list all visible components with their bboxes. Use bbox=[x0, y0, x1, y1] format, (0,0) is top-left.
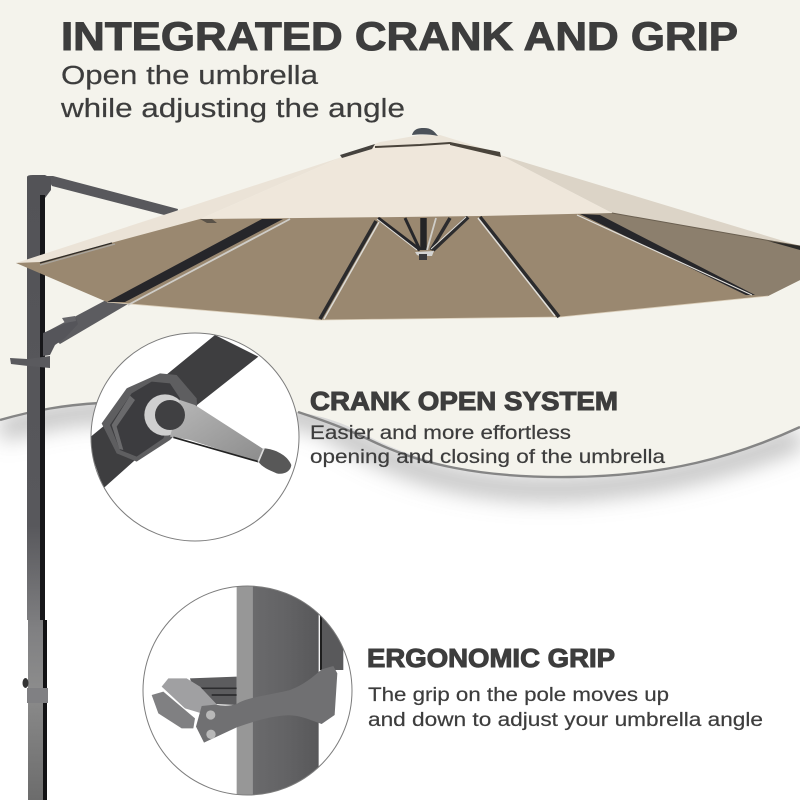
grip description bbox=[368, 685, 763, 731]
lower arm hinge bbox=[43, 318, 78, 356]
crank housing bbox=[102, 373, 197, 462]
crank small bbox=[62, 316, 76, 323]
canopy underside bright edge bbox=[107, 296, 768, 320]
umbrella canopy bbox=[16, 128, 800, 320]
rib stub bbox=[200, 219, 217, 223]
lower pole collar bbox=[27, 688, 48, 703]
grip band bbox=[196, 666, 337, 743]
grip handle block bbox=[152, 678, 217, 728]
grip description: and down to adjust your umbrella angle bbox=[368, 710, 763, 731]
grip detail circle bbox=[143, 583, 352, 800]
canopy underside bbox=[16, 213, 800, 320]
right outer panel bbox=[580, 213, 800, 296]
lower pole knob bbox=[22, 678, 28, 688]
rib right main bbox=[577, 214, 755, 295]
crank description: opening and closing of the umbrella bbox=[310, 447, 666, 468]
grip pole bbox=[237, 583, 319, 800]
crank tube bbox=[87, 335, 258, 488]
crank lever arm bbox=[170, 400, 263, 462]
crank lever tip bbox=[258, 448, 291, 474]
subtitle: while adjusting the angle bbox=[60, 95, 405, 123]
rib centre left bbox=[320, 221, 379, 319]
crank bolt cap bbox=[155, 400, 185, 430]
pole grip small bbox=[10, 356, 50, 368]
canopy right wing bbox=[500, 155, 800, 246]
crank description: Easier and more effortless bbox=[310, 423, 571, 444]
canopy top vent bbox=[340, 135, 498, 157]
canopy left wing bbox=[16, 157, 342, 263]
left tip rib bbox=[40, 243, 115, 265]
main pole bbox=[27, 175, 51, 800]
rib left main bbox=[107, 219, 283, 302]
rib hub struts bbox=[377, 217, 468, 260]
canopy front panel bbox=[200, 144, 612, 219]
rib centre right bbox=[478, 217, 559, 317]
subtitle: Open the umbrella bbox=[61, 62, 319, 90]
grip description: The grip on the pole moves up bbox=[368, 685, 669, 706]
grip screws bbox=[206, 710, 216, 739]
title: INTEGRATED CRANK AND GRIP bbox=[61, 15, 738, 59]
crank description bbox=[310, 423, 666, 468]
crank bolt ring bbox=[144, 394, 180, 436]
grip mount bbox=[190, 677, 237, 705]
umbrella pole and arms bbox=[10, 175, 178, 800]
crank detail circle bbox=[87, 333, 299, 541]
crank heading: CRANK OPEN SYSTEM bbox=[310, 388, 618, 416]
grip heading: ERGONOMIC GRIP bbox=[367, 645, 615, 673]
subtitle bbox=[60, 62, 405, 123]
grip rear pole bbox=[322, 618, 344, 670]
lower support arm bbox=[46, 299, 128, 344]
canopy finial bbox=[412, 128, 438, 136]
upper support arm bbox=[46, 176, 178, 218]
